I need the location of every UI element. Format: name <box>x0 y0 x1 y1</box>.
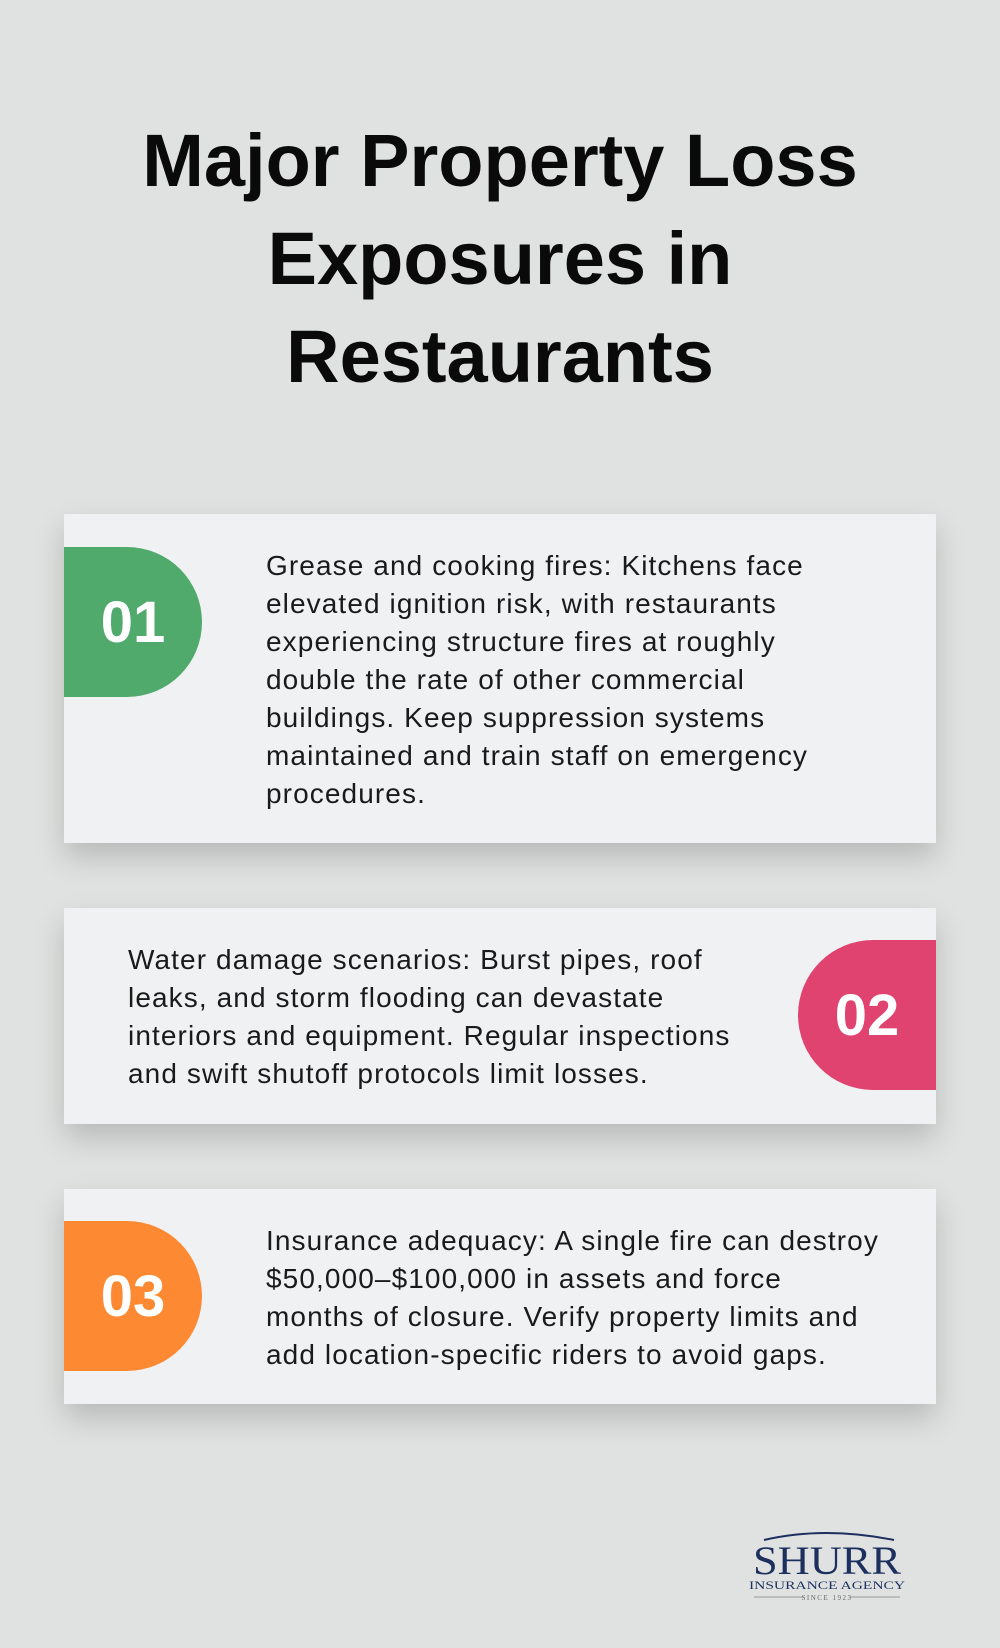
text: grease fires: double the rate of other commercial <box>266 664 745 695</box>
badge 02 <box>798 940 936 1090</box>
panel: card 02 <box>64 908 936 1124</box>
logo: SINCE 1923 <box>802 1594 852 1602</box>
badge 03 <box>64 1221 202 1371</box>
badge 01: 01 <box>101 590 165 654</box>
badge 01 <box>64 547 202 697</box>
title <box>142 119 858 398</box>
text: grease fires <box>266 550 808 809</box>
text: water damage: Water damage scenarios: Burst pipes, roof <box>128 944 703 975</box>
text: insurance adequacy: add location-specific riders to avoid gaps. <box>266 1339 827 1370</box>
title: Major Property Loss <box>142 119 858 202</box>
panel: card 01 <box>64 514 936 843</box>
text: water damage: interiors and equipment. Regular inspections <box>128 1020 730 1051</box>
panel: card 03 <box>64 1189 936 1404</box>
logo: INSURANCE AGENCY <box>749 1578 905 1592</box>
badge 02: 02 <box>835 982 899 1048</box>
text: grease fires: Grease and cooking fires: Kitchens face <box>266 550 804 581</box>
logo: SHURR <box>753 1538 901 1583</box>
logo <box>749 1532 905 1602</box>
text: grease fires: buildings. Keep suppression systems <box>266 702 765 733</box>
text: insurance adequacy <box>266 1225 879 1370</box>
text: insurance adequacy: $50,000–$100,000 in assets and force <box>266 1263 782 1294</box>
text: grease fires: experiencing structure fires at roughly <box>266 626 776 657</box>
title: Exposures in <box>268 217 732 300</box>
text: grease fires: procedures. <box>266 778 426 809</box>
text: water damage: leaks, and storm flooding can devastate <box>128 982 664 1013</box>
text: insurance adequacy: months of closure. Verify property limits and <box>266 1301 859 1332</box>
text: grease fires: elevated ignition risk, with restaurants <box>266 588 777 619</box>
badge 03: 03 <box>101 1264 165 1328</box>
title: Restaurants <box>286 315 714 398</box>
text: water damage <box>128 944 730 1089</box>
text: water damage: and swift shutoff protocols limit losses. <box>128 1058 649 1089</box>
text: insurance adequacy: Insurance adequacy: A single fire can destroy <box>266 1225 879 1256</box>
text: grease fires: maintained and train staff on emergency <box>266 740 808 771</box>
